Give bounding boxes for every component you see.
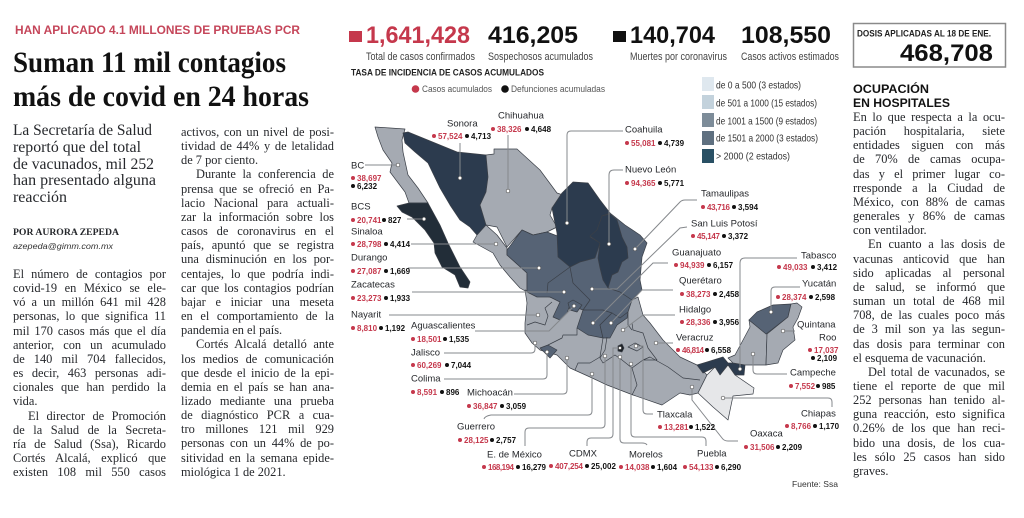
label: Guanajuato: 94,939 (680, 261, 705, 270)
article column 3: 0.26% de los que han reci- (853, 421, 1005, 435)
stat: deaths: Muertes por coronavirus (630, 51, 727, 63)
label: Campeche: Campeche (790, 368, 836, 378)
article column 3: sido aplicadas al personal (853, 266, 1005, 280)
label: Morelos (618, 355, 678, 472)
label: Guanajuato: 6,157 (713, 261, 734, 270)
label: Nuevo León: 94,365 (631, 179, 656, 188)
stat: deaths: 140,704 (630, 22, 716, 49)
label: Coahuila (565, 124, 685, 225)
label: Veracruz: Veracruz (676, 332, 714, 344)
state: Sonora (403, 132, 488, 235)
article column 2: prensa que se ofreció en Pa- (181, 182, 334, 196)
label: Tabasco: Tabasco (801, 250, 836, 262)
kicker: HAN APLICADO 4.1 MILLONES DE PRUEBAS PCR (15, 25, 301, 37)
article column 2: lizado mediante una prueba (181, 394, 334, 408)
label: Jalisco: 7,044 (451, 361, 472, 370)
colour legend: > 2000 (2 estados) (716, 150, 790, 162)
label: Querétaro: 2,458 (719, 290, 740, 299)
label: Estado de México: 168,194 (488, 463, 515, 472)
byline (13, 228, 119, 251)
map heading: TASA DE INCIDENCIA DE CASOS ACUMULADOS (351, 68, 544, 78)
dot legend (412, 84, 605, 94)
label: Durango: 1,669 (390, 267, 411, 276)
article column 2: miológica 1 de 2021. (181, 465, 286, 479)
article column 2: los medios de comunicación (181, 352, 334, 366)
label: Oaxaca: 2,209 (782, 443, 803, 452)
article column 2: que desde el inicio de la epi- (181, 366, 334, 380)
article column 2: personas con un 44% de po- (181, 436, 334, 450)
label: CDMX (549, 346, 622, 471)
label: Jalisco: 60,269 (417, 361, 442, 370)
label: Baja California: 38,697 (357, 174, 382, 183)
label: Tamaulipas: 43,716 (707, 203, 731, 212)
label: Guerrero (457, 372, 594, 445)
state: Tabasco (697, 357, 745, 375)
stat: suspected: 416,205 (488, 22, 578, 49)
label: Veracruz (654, 332, 732, 355)
stat: total confirmed: 1,641,428 (366, 22, 470, 49)
label: Baja California Sur: 20,741 (357, 216, 382, 225)
label: Tlaxcala: Tlaxcala (657, 410, 693, 420)
label: Tabasco: 3,412 (817, 263, 838, 272)
article column 3: 708, de las cuales poco más (853, 308, 1005, 322)
article column 3: de 3 mil son ya las segun- (853, 322, 1005, 336)
state: Campeche (728, 320, 767, 365)
label: Durango: 27,087 (357, 267, 382, 276)
article column 3: México, con 88% de camas (853, 195, 1005, 209)
label: Campeche (751, 352, 836, 391)
article column 2: activos, con un nivel de posi- (181, 125, 334, 139)
article column 3: das dosis para terminar con (853, 336, 1005, 350)
article column 1: El director de Promoción (28, 409, 166, 423)
label: CDMX: 25,002 (591, 462, 617, 471)
label: Tamaulipas: 3,594 (738, 203, 759, 212)
label: Quintana Roo: 17,037 (814, 346, 839, 355)
state: Tlaxcala (628, 343, 643, 351)
article column 2: Durante la conferencia de (196, 167, 334, 181)
label: Sinaloa: 28,798 (357, 240, 382, 249)
label: Hidalgo: 28,336 (686, 318, 711, 327)
stat: active (741, 22, 839, 63)
article column 3: En cuanto a las dosis de (868, 237, 1005, 251)
state: Quintana Roo (766, 303, 802, 365)
label: Oaxaca: 31,506 (750, 443, 775, 452)
article column 3: de 70% de camas ocupa- (853, 152, 1005, 166)
label: Zacatecas: 23,273 (357, 294, 382, 303)
label: Hidalgo: 3,956 (719, 318, 740, 327)
stat: suspected: Sospechosos acumulados (488, 51, 593, 63)
article column 3: Del total de vacunados, se (868, 365, 1005, 379)
article column 2 (181, 125, 334, 479)
article column 2: centajes, lo que podría indi- (181, 267, 334, 281)
article column 2: bajar e iniciar una meseta (181, 295, 334, 309)
label: Nuevo León: 5,771 (664, 179, 685, 188)
article column 2: Cortés Alcalá detalló ante (196, 337, 334, 351)
label: Estado de México: 16,279 (522, 463, 547, 472)
article column 1: personas, lo que significa 11 (13, 309, 166, 323)
label: Yucatán: 2,598 (815, 293, 836, 302)
article column 1: El número de contagios por (13, 267, 166, 281)
label: Aguascalientes: Aguascalientes (411, 320, 476, 332)
label: Tabasco: 49,033 (783, 263, 808, 272)
title: más de covid en 24 horas (13, 80, 309, 113)
article column 2: zar la información sobre los (181, 210, 334, 224)
label: Nayarit: 8,810 (357, 324, 378, 333)
label: CDMX: CDMX (569, 448, 598, 460)
state: Yucatán (749, 304, 791, 334)
label: San Luis Potosí: 45,147 (697, 232, 721, 241)
article column 1: es decir, 463 personas adi- (13, 366, 166, 380)
label: Zacatecas (351, 280, 566, 303)
deck: reacción (13, 189, 67, 206)
article column 1: cionales que han perdido la (13, 380, 166, 394)
article column 3: bido una dosis, de los cua- (853, 436, 1005, 450)
label: Yucatán: Yucatán (802, 278, 836, 290)
title (13, 46, 309, 113)
deck: reportó que del total (13, 139, 142, 156)
label: Colima: 8,591 (417, 388, 438, 397)
doses box: DOSIS APLICADAS AL 18 DE ENE. (857, 28, 991, 40)
article column 1: anterior, con un acumulado (13, 338, 166, 352)
label: Quintana Roo: Quintana (797, 320, 836, 330)
label: Tlaxcala: 1,522 (695, 423, 716, 432)
label: Tabasco (738, 250, 838, 371)
label: Estado de México (482, 354, 607, 472)
label: Sinaloa: Sinaloa (351, 226, 383, 238)
label: Baja California: 6,232 (357, 182, 378, 191)
source: Fuente: Ssa (792, 479, 838, 489)
label: Sonora: 57,524 (438, 132, 463, 141)
label: Michoacán (467, 356, 569, 411)
label: Chiapas: Chiapas (801, 408, 836, 420)
article column 2: tividad de 44% y de letalidad (181, 139, 334, 153)
stat: deaths (613, 22, 727, 63)
label: Guerrero: Guerrero (457, 422, 495, 432)
hospital heading (853, 83, 950, 110)
label: Sinaloa (351, 226, 498, 249)
label: Guerrero: 28,125 (464, 436, 489, 445)
article column 1 (13, 267, 166, 479)
article column 2: sitividad en la semana epide- (181, 451, 334, 465)
label: Colima: 896 (446, 388, 460, 397)
article column 3: 252 personas han tenido al- (853, 393, 1005, 407)
label: Baja California Sur (351, 202, 426, 225)
label: Oaxaca: Oaxaca (750, 428, 783, 440)
label: Colima (411, 350, 549, 397)
state: Colima (540, 345, 557, 358)
colour legend (702, 77, 818, 163)
article column 3: graves. (853, 464, 888, 478)
state: Guanajuato (577, 310, 612, 338)
label: San Luis Potosí: 3,372 (728, 232, 749, 241)
article column 2: casos de coronavirus en el (181, 224, 334, 238)
article column 3 (853, 110, 1005, 478)
article column 3: generales y 86% de camas (853, 209, 1005, 223)
label: Baja California Sur: BCS (351, 202, 371, 212)
label: Guanajuato: Guanajuato (672, 248, 721, 258)
label: Chihuahua: 4,648 (531, 125, 552, 134)
label: Oaxaca (690, 385, 803, 452)
state: Coahuila (552, 182, 610, 267)
label: Guerrero: 2,757 (496, 436, 517, 445)
article column 3: el esquema de vacunación. (853, 351, 986, 365)
article column 3: das y el primer lugar co- (853, 167, 1005, 181)
article column 3: de salud, se informó que (853, 280, 1005, 294)
label: Durango (351, 252, 541, 276)
label: Chiapas: 8,766 (791, 422, 812, 431)
article column 3: entidades siguen con más (853, 138, 1005, 152)
article column 2: en el comportamiento de la (181, 309, 334, 323)
label: Aguascalientes: 18,501 (417, 335, 442, 344)
state: Chihuahua (480, 149, 563, 247)
article column 2: de diagnóstico PCR a cua- (181, 408, 334, 422)
colour legend: de 501 a 1000 (15 estados) (716, 98, 817, 110)
label: San Luis Potosí: San Luis Potosí (691, 218, 758, 230)
state: Baja California Sur (397, 203, 470, 288)
article column 1: existen 108 mil 550 casos (13, 465, 166, 479)
article column 1: de la Salud de la Secreta- (13, 423, 166, 437)
label: Puebla: 6,290 (721, 463, 742, 472)
hospital heading: EN HOSPITALES (853, 98, 950, 110)
deck: han presentado alguna (13, 172, 156, 189)
label: Yucatán: 28,374 (782, 293, 807, 302)
label: Sonora: 4,713 (471, 132, 492, 141)
label: Puebla: Puebla (697, 448, 727, 460)
state: Nuevo León (590, 214, 628, 288)
central states (507, 210, 647, 325)
label: Querétaro (609, 276, 740, 325)
deck: La Secretaría de Salud (13, 122, 152, 139)
label: Puebla (629, 362, 742, 472)
dot legend: Casos acumulados (422, 84, 492, 94)
state: Sinaloa (473, 225, 527, 292)
stat: total confirmed (349, 22, 475, 63)
label: Coahuila: 4,739 (664, 139, 685, 148)
label: Querétaro: 38,273 (686, 290, 711, 299)
colour legend: de 0 a 500 (3 estados) (716, 80, 801, 92)
southern states (525, 290, 707, 405)
label: Michoacán: 3,059 (506, 402, 527, 411)
label: Aguascalientes: 1,535 (449, 335, 470, 344)
article column 2: de 7 por ciento. (181, 153, 258, 167)
colour legend: de 1501 a 2000 (3 estados) (716, 132, 818, 144)
label: Jalisco: Jalisco (411, 348, 440, 358)
label: Morelos: 1,604 (657, 463, 678, 472)
doses box: 468,708 (900, 40, 993, 67)
label: Quintana Roo (781, 320, 839, 363)
article column 2: país, apuntó que se registra (181, 238, 334, 252)
article column 3: tiene el reporte de que mil (853, 379, 1005, 393)
article column 3: pación hospitalaria, siete (853, 124, 1005, 138)
article column 2: una disminución en los por- (181, 252, 334, 266)
article column 2: tro millones 121 mil 929 (181, 422, 334, 436)
stat: suspected (488, 22, 593, 63)
label: Yucatán (769, 278, 836, 314)
label: Nayarit (351, 310, 540, 333)
label: Quintana Roo: Roo (819, 332, 836, 344)
label: Chihuahua: Chihuahua (498, 110, 545, 122)
label: Aguascalientes (411, 304, 576, 344)
label: Baja California Sur: 827 (388, 216, 402, 225)
label: Zacatecas: 1,933 (390, 294, 411, 303)
title: Suman 11 mil contagios (13, 46, 286, 79)
article column 1: de 140 mil 704 fallecidos, (13, 352, 166, 366)
colour legend: de 1001 a 1500 (9 estados) (716, 116, 817, 128)
label: Hidalgo: Hidalgo (679, 304, 711, 316)
stat: total confirmed: Total de casos confirmados (366, 51, 475, 63)
label: Chiapas: 1,170 (819, 422, 840, 431)
article column 2: pandemia en el país. (181, 323, 282, 337)
label: Jalisco (411, 341, 537, 370)
label: Nayarit: Nayarit (351, 310, 381, 320)
label: Zacatecas: Zacatecas (351, 280, 395, 290)
hospital heading: OCUPACIÓN (853, 83, 929, 96)
label: Tamaulipas (633, 188, 759, 251)
article column 3: les sólo 25 casos han sido (853, 450, 1005, 464)
label: Guanajuato (591, 248, 734, 325)
label: Baja California (351, 160, 400, 191)
article column 2: demia en el país se han ana- (181, 380, 334, 394)
article column 3: En lo que respecta a la ocu- (853, 110, 1005, 124)
dot legend: Defunciones acumuladas (511, 84, 605, 94)
label: Quintana Roo: 2,109 (817, 354, 838, 363)
label: Tamaulipas: Tamaulipas (701, 188, 749, 200)
label: Puebla: 54,133 (689, 463, 714, 472)
doses box (854, 24, 1006, 67)
byline: azepeda@gimm.com.mx (13, 241, 114, 251)
article column 1: ría de Salud (Ssa), Ricardo (13, 437, 166, 451)
label: Chiapas (721, 396, 840, 431)
state: Baja California (375, 127, 428, 203)
label: Sinaloa: 4,414 (390, 240, 411, 249)
article column 2: car que los contagios podrían (181, 281, 334, 295)
label: Veracruz: 6,558 (711, 346, 732, 355)
label: Veracruz: 46,814 (682, 346, 705, 355)
article column 3: rresponde a la Ciudad de (853, 181, 1005, 195)
label: Campeche: 7,552 (795, 382, 816, 391)
label: Campeche: 985 (822, 382, 836, 391)
label: Baja California: BC (351, 160, 364, 172)
article column 3: con ventilador. (853, 223, 927, 237)
label: Estado de México: E. de México (487, 450, 542, 460)
article column 3: vacunas anticovid que han (853, 252, 1005, 266)
label: Colima: Colima (411, 374, 441, 384)
map of Mexico (375, 127, 802, 420)
label: Durango: Durango (351, 252, 387, 264)
stat: active: Casos activos estimados (741, 51, 839, 63)
state: CDMX (618, 344, 624, 352)
internal state borders (527, 267, 700, 395)
label: Coahuila: Coahuila (625, 124, 663, 136)
state: Aguascalientes (568, 300, 582, 312)
label: CDMX: 407,254 (555, 462, 584, 471)
label: Nuevo León (607, 164, 685, 246)
label: Coahuila: 55,081 (631, 139, 656, 148)
label: Chihuahua (491, 110, 552, 193)
article column 1: mil 170 casos más que el día (13, 324, 166, 338)
article column 1: covid-19 en México se ele- (13, 281, 166, 295)
state: Chiapas (698, 365, 754, 420)
label: Michoacán: Michoacán (467, 388, 513, 398)
label: Morelos: 14,038 (625, 463, 650, 472)
article column 3: suman un total de 468 mil (853, 294, 1005, 308)
stat: active: 108,550 (741, 22, 831, 49)
article column 1: Cortés Alcalá, explicó que (13, 451, 166, 465)
state: Querétaro (600, 312, 628, 338)
label: Sonora: Sonora (447, 118, 478, 130)
label: Querétaro: Querétaro (679, 276, 722, 286)
article column 2: lacio Nacional para actuali- (181, 196, 334, 210)
label: Tlaxcala: 13,281 (664, 423, 689, 432)
label: Tlaxcala (634, 344, 716, 432)
article column 1: vó a un millón 641 mil 428 (13, 295, 166, 309)
label: San Luis Potosí (590, 218, 758, 291)
deck (13, 122, 156, 206)
article column 1: vida. (13, 394, 37, 408)
label: Sonora (432, 118, 492, 180)
label: Morelos: Morelos (629, 450, 663, 460)
label: Nuevo León: Nuevo León (625, 164, 676, 176)
byline: POR AURORA ZEPEDA (13, 228, 119, 238)
deck: de vacunados, mil 252 (13, 156, 154, 173)
label: Nayarit: 1,192 (385, 324, 406, 333)
label: Chihuahua: 38,326 (497, 125, 522, 134)
label: Michoacán: 36,847 (473, 402, 498, 411)
label: Hidalgo (621, 304, 740, 332)
article column 3: guna reacción, esto significa (853, 407, 1005, 421)
